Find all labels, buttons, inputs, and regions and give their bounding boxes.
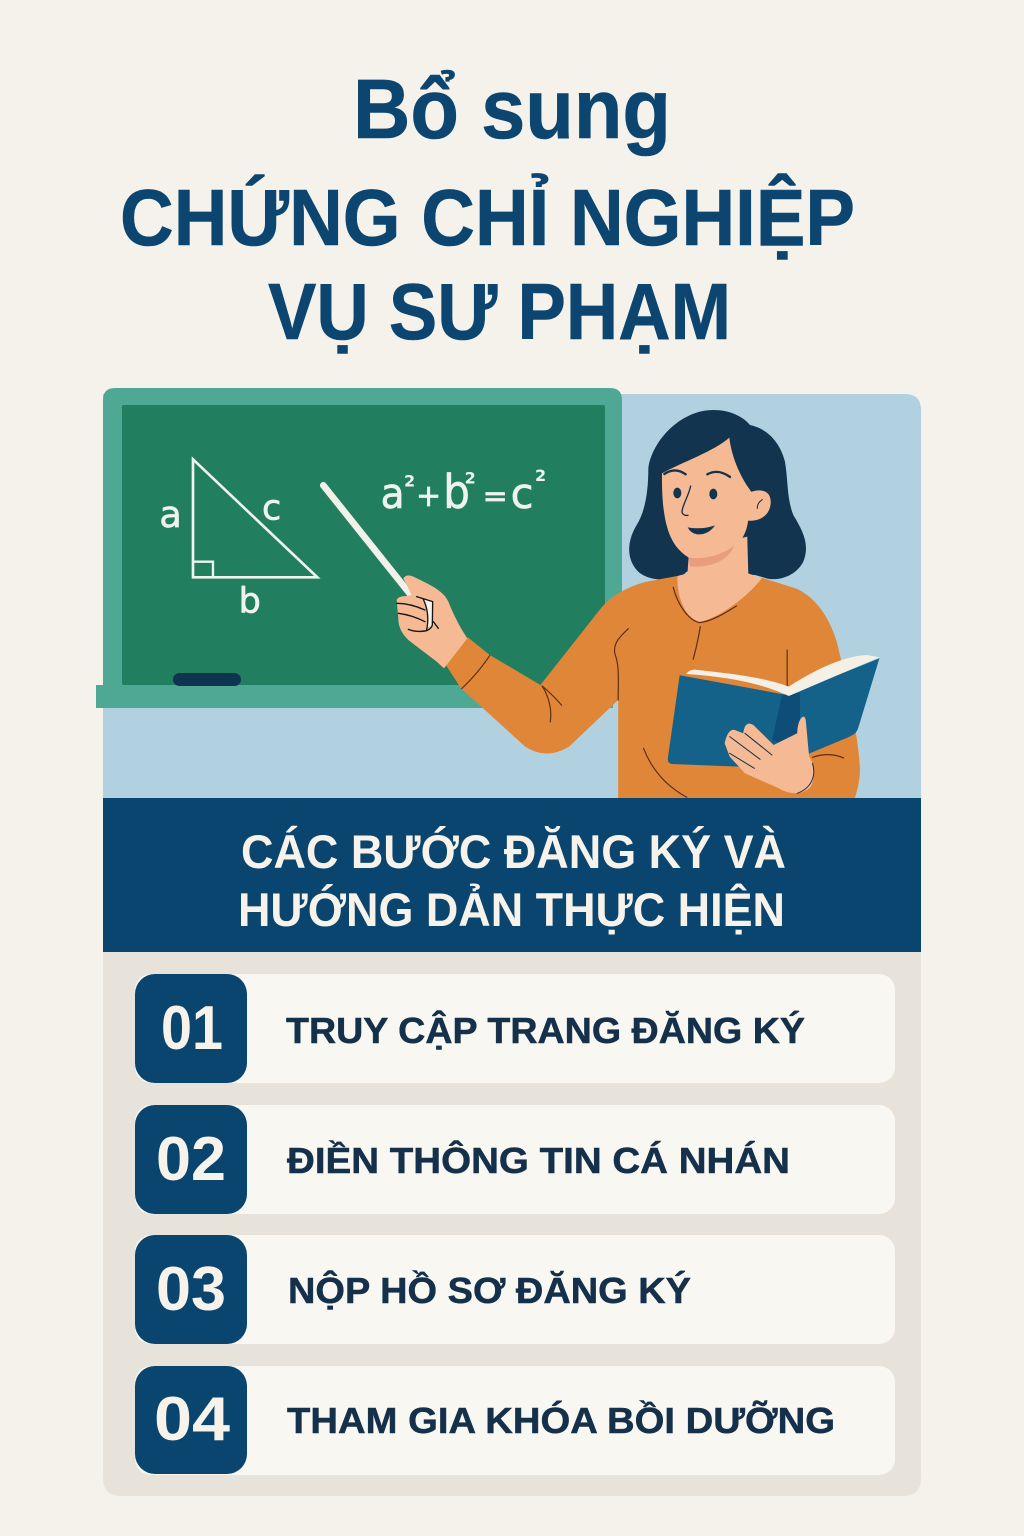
panel: steps list [103, 952, 921, 1496]
triangle diagram with labels: a [159, 493, 182, 536]
hand holding pointer [397, 575, 467, 668]
step 2 [135, 1105, 895, 1214]
formula: Pythagorean theorem: + [416, 479, 441, 514]
formula: Pythagorean theorem: b [443, 466, 470, 520]
title: Bổ sung [353, 62, 671, 156]
step 3: 03 [156, 1255, 226, 1324]
banner: section heading: HƯỚNG DẢN THỰC HIỆN [238, 883, 785, 936]
banner: section heading [103, 798, 921, 952]
step 4: 04 [154, 1385, 231, 1454]
formula: Pythagorean theorem: = [483, 479, 508, 514]
triangle diagram with labels: b [239, 582, 261, 622]
formula: Pythagorean theorem: 2 [465, 468, 476, 487]
formula: Pythagorean theorem: a [381, 469, 405, 518]
neck [677, 537, 762, 622]
pointer stick [323, 485, 412, 596]
hand holding book [725, 717, 814, 793]
face [662, 438, 753, 558]
step 2: 02 [156, 1125, 226, 1194]
step 1 [135, 974, 895, 1083]
step 3: NỘP HỒ SƠ ĐĂNG KÝ [288, 1269, 691, 1311]
step 1: 01 [161, 994, 223, 1063]
facial features [664, 470, 763, 534]
step 3 [135, 1235, 895, 1344]
banner: section heading: CÁC BƯỚC ĐĂNG KÝ VÀ [241, 825, 786, 878]
triangle diagram with labels [159, 459, 317, 622]
ear [748, 490, 771, 521]
neck shadow [688, 546, 734, 567]
formula: Pythagorean theorem [381, 466, 546, 520]
body, sweater, book [445, 537, 879, 798]
step 4 [135, 1366, 895, 1475]
head and face [662, 438, 771, 567]
formula: Pythagorean theorem: 2 [404, 472, 415, 491]
step 4: THAM GIA KHÓA BỒI DƯỠNG [287, 1399, 835, 1441]
title [120, 62, 855, 356]
formula: Pythagorean theorem: c [511, 469, 534, 518]
formula: Pythagorean theorem: 2 [535, 466, 546, 485]
sweater fold lines [462, 587, 844, 797]
orange sweater [445, 576, 860, 798]
panel: classroom illustration [96, 388, 921, 798]
step 2: ĐIỀN THÔNG TIN CÁ NHÁN [287, 1139, 790, 1181]
step 1: TRUY CẬP TRANG ĐĂNG KÝ [286, 1009, 805, 1051]
triangle diagram with labels: c [262, 488, 281, 528]
hair [629, 410, 806, 579]
title: VỤ SƯ PHẠM [268, 267, 731, 356]
teacher figure [445, 410, 879, 798]
title: CHỨNG CHỈ NGHIỆP [120, 173, 855, 262]
open book [668, 655, 879, 767]
chalkboard [96, 388, 622, 708]
